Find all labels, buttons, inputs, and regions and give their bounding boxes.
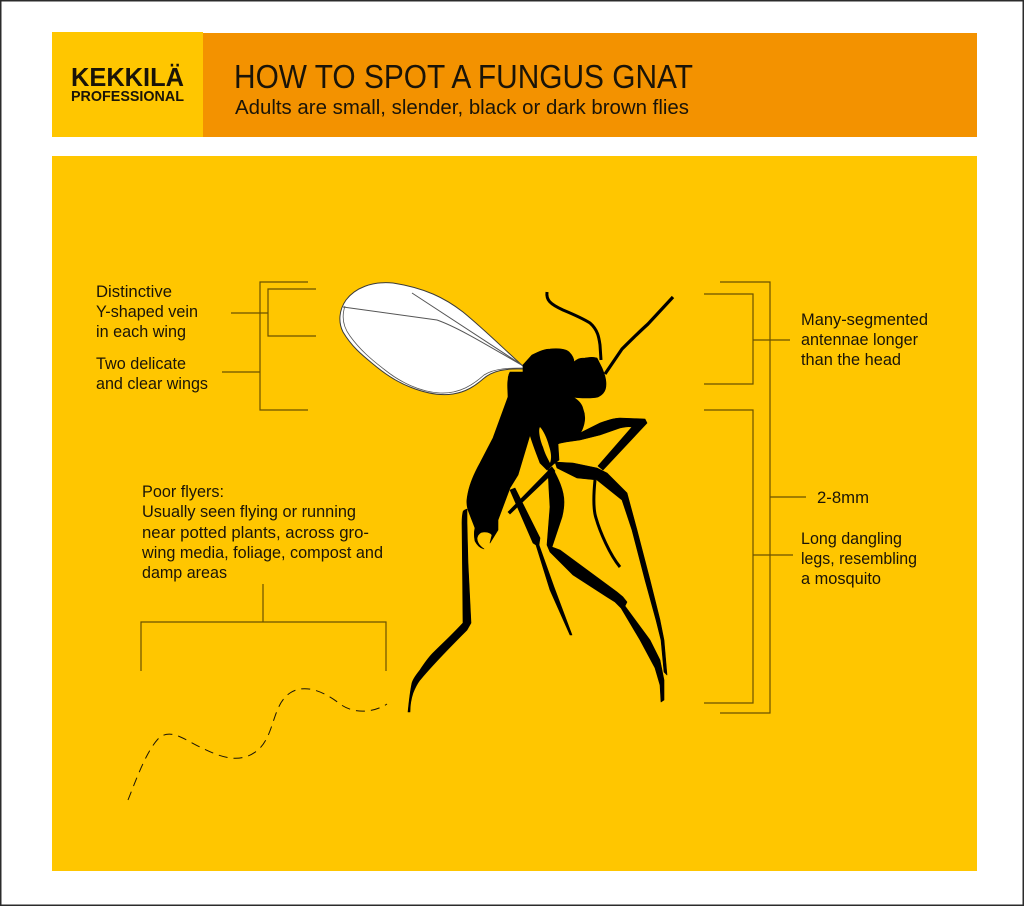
legs annotation text: a mosquito	[801, 569, 881, 588]
poor flyers text: Usually seen flying or running	[142, 502, 356, 521]
antennae annotation text: than the head	[801, 350, 901, 369]
right brackets	[704, 282, 806, 713]
subtitle: Adults are small, slender, black or dark brown flies	[235, 97, 689, 119]
middle leg	[547, 467, 664, 702]
poor flyers text: Poor flyers:	[142, 482, 224, 501]
antennae annotation text: antennae longer	[801, 330, 918, 349]
head, thorax and abdomen	[467, 349, 606, 549]
wing annotation text: Y-shaped vein	[96, 282, 198, 341]
poor flyers text: wing media, foliage, compost and	[141, 543, 383, 562]
wing annotation text: Y-shaped vein: in each wing	[96, 322, 186, 341]
wing annotation text: Y-shaped vein: Distinctive	[96, 282, 172, 301]
size label: 2-8mm	[817, 488, 869, 507]
front tarsus	[594, 480, 620, 567]
coxa gap	[539, 427, 551, 463]
poor flyers text	[141, 482, 383, 582]
legs annotation text	[801, 529, 917, 588]
left brackets	[222, 282, 316, 410]
gnat illustration	[340, 283, 673, 712]
wing annotation text: clear wings: and clear wings	[96, 374, 208, 393]
wing annotation text: clear wings	[96, 354, 208, 393]
poor flyers text: damp areas	[142, 563, 227, 582]
poor flyers bracket	[141, 584, 386, 671]
dashed flight path	[128, 689, 387, 800]
legs annotation text: legs, resembling	[801, 549, 917, 568]
wing annotation text: clear wings: Two delicate	[96, 354, 186, 373]
header band	[52, 32, 977, 137]
title: HOW TO SPOT A FUNGUS GNAT	[234, 58, 693, 95]
wing	[340, 283, 525, 395]
front leg	[555, 462, 667, 675]
wing annotation text: Y-shaped vein: Y-shaped vein	[96, 302, 198, 321]
logo: KEKKILÄ	[71, 62, 184, 92]
antennae annotation text: Many-segmented	[801, 310, 928, 329]
logo: PROFESSIONAL	[71, 88, 184, 105]
hind leg	[510, 488, 572, 635]
front femur	[556, 418, 647, 470]
poor flyers text: near potted plants, across gro-	[142, 523, 369, 542]
antennae annotation text	[801, 310, 928, 369]
logo	[71, 62, 184, 105]
crossing tibia	[508, 467, 555, 514]
main panel	[52, 156, 977, 871]
antennae	[547, 292, 673, 374]
legs annotation text: Long dangling	[801, 529, 902, 548]
rear leg	[408, 509, 471, 712]
